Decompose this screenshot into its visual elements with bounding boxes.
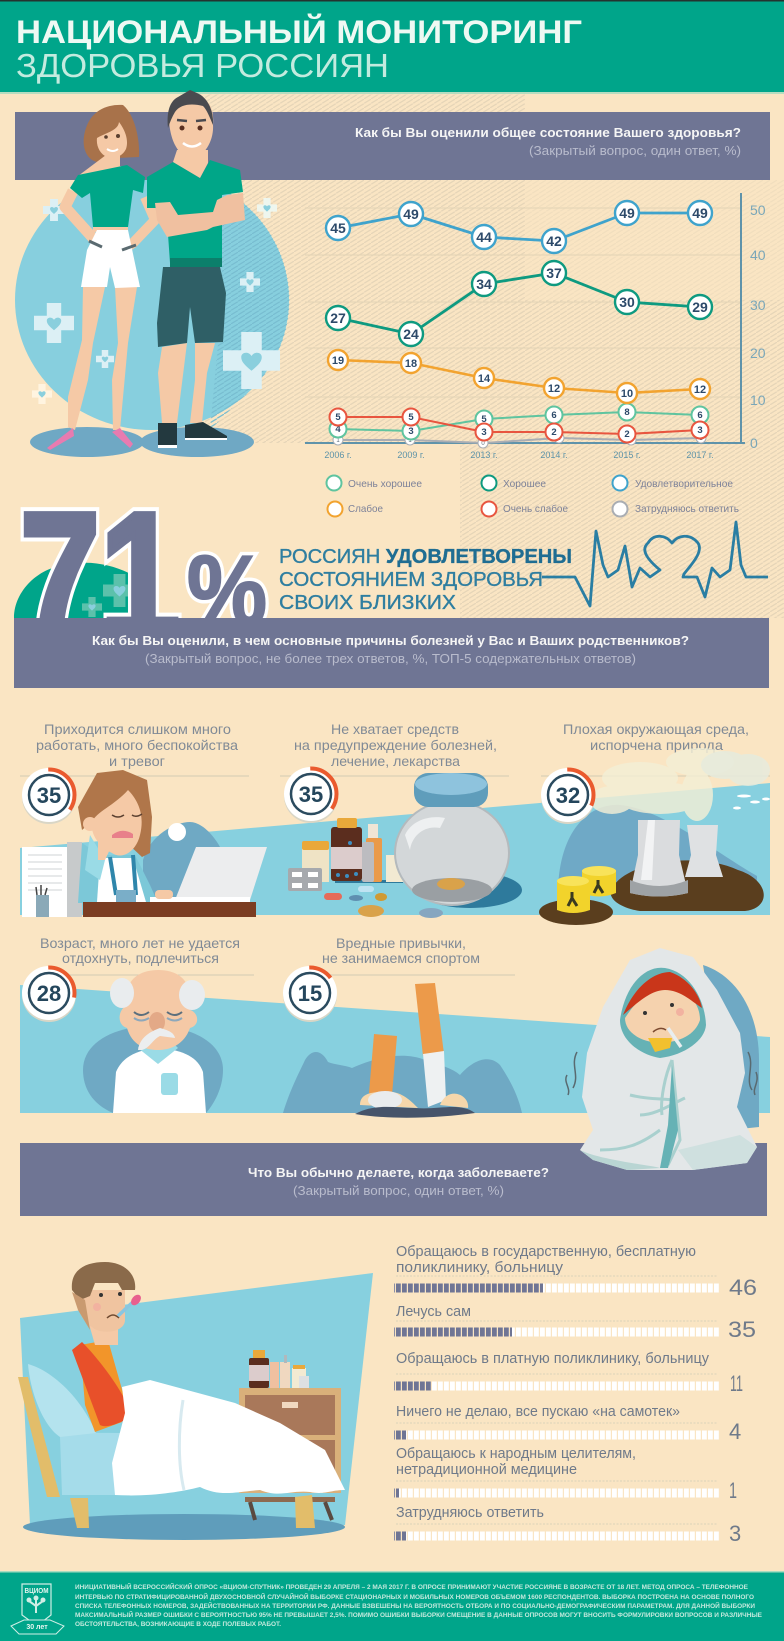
year labels: 2015 г.: [613, 450, 641, 460]
answers bar chart: нетрадиционной медицине: [396, 1462, 577, 1478]
footer logo: 30 лет: [26, 1624, 48, 1631]
legend: Очень слабое: [503, 503, 568, 515]
bed frame and mattress: [18, 1364, 315, 1528]
series: good: 34: [476, 276, 492, 292]
cause labels row 1: лечение, лекарства: [331, 753, 460, 769]
illustration: old man: [83, 970, 223, 1113]
causes row 2 band: [20, 985, 770, 1113]
icon: heartbeat line: [542, 522, 768, 606]
illustration: empty jar and medicine: [288, 773, 522, 918]
series: difficult to answer: 1: [629, 438, 633, 444]
panel: question 3: [20, 1143, 767, 1216]
illustration: person wrapped in blanket: [566, 948, 759, 1170]
series: good: 24: [403, 326, 419, 342]
gauge: 28 age: [22, 966, 76, 1022]
series: very poor: 2: [624, 429, 630, 440]
series: poor: 14: [478, 373, 491, 385]
subtitle: ЗДОРОВЬЯ РОССИЯН: [16, 47, 389, 84]
year labels: 2013 г.: [470, 450, 498, 460]
big number 71%: %: [187, 535, 267, 645]
answers bar chart: Обращаюсь в государственную, бесплатную: [396, 1244, 696, 1260]
axis labels: 10: [750, 392, 766, 408]
illustration: cigarettes: [283, 983, 522, 1118]
footer note: [75, 1582, 763, 1628]
gauge: 35 no funds: 35: [299, 782, 323, 807]
series: satisfactory: 49: [692, 205, 708, 221]
decorative crosses: [32, 198, 280, 404]
axis labels: 40: [750, 247, 766, 263]
statement text: СОСТОЯНИЕМ ЗДОРОВЬЯ: [279, 569, 543, 591]
series: poor: 10: [621, 388, 633, 400]
blanket: [112, 1380, 345, 1495]
cause labels row 1: работать, много беспокойства: [36, 737, 238, 753]
cause labels row 1: Не хватает средств: [331, 721, 459, 737]
panel: question 1: Как бы Вы оценили общее состояние Вашего здоровья?: [355, 125, 741, 140]
footer note: ИНИЦИАТИВНЫЙ ВСЕРОССИЙСКИЙ ОПРОС «ВЦИОМ-СПУТНИК» ПРОВЕДЕН 29 АПРЕЛЯ – 2 МАЯ 2017 Г. В ОПРОСЕ ПРИНИМАЮТ УЧАСТИЕ РОССИЯНЕ В ВОЗРАСТЕ ОТ 18 ЛЕТ. МЕТОД ОПРОСА – ТЕЛЕФОННОЕ: [75, 1582, 749, 1591]
causes row 1 band: [20, 783, 770, 915]
legend: Хорошее: [503, 478, 546, 490]
answers bar chart: 1: [729, 1478, 737, 1503]
legend: Удовлетворительное: [635, 478, 733, 490]
big number 71%: %: [187, 535, 267, 645]
year labels: [324, 450, 714, 460]
series: very good: 6: [551, 410, 557, 421]
series: very good: 4: [335, 424, 341, 435]
series: difficult to answer: [333, 433, 706, 448]
nightstand: [239, 1388, 341, 1520]
series: satisfactory: 42: [546, 233, 562, 249]
series: satisfactory: 49: [619, 205, 635, 221]
gauge: 15 habits: [283, 966, 337, 1022]
answers bar chart: поликлинику, больницу: [396, 1260, 564, 1276]
footer note: МАКСИМАЛЬНЫЙ РАЗМЕР ОШИБКИ С ВЕРОЯТНОСТЬЮ 95% НЕ ПРЕВЫШАЕТ 2,5%. ПОМИМО ОШИБКИ ВЫБОРКИ СМЕЩЕНИЕ В ДАННЫЕ ОПРОСОВ МОГУТ ВНОСИТЬ ФОРМУЛИРОВКИ ВОПРОСОВ И РАЗЛИЧНЫЕ: [75, 1610, 763, 1619]
gauge: 32 environment: [541, 768, 595, 824]
cause labels row 2: Возраст, много лет не удается: [40, 935, 240, 951]
series: difficult to answer: 1: [557, 436, 561, 442]
series: difficult to answer: 1: [336, 438, 340, 444]
illustration: power plant and pollution: [539, 748, 770, 925]
series: very poor: 3: [697, 425, 703, 436]
series: very poor: 5: [335, 412, 341, 423]
answers bar chart: Лечусь сам: [396, 1304, 471, 1320]
big number 71%: 71: [20, 476, 180, 677]
statement text: [279, 546, 572, 614]
footer note: ИНТЕРВЬЮ ПО СТРАТИФИЦИРОВАННОЙ ДВУХОСНОВНОЙ СЛУЧАЙНОЙ ВЫБОРКЕ СТАЦИОНАРНЫХ И МОБИЛЬНЫХ НОМЕРОВ ОБЪЕМОМ 1600 РЕСПОНДЕНТОВ. ВЫБОРКА ПОСТРОЕНА НА ОСНОВЕ ПОЛНОГО: [75, 1592, 754, 1601]
series: very poor: 5: [408, 412, 414, 423]
illustration: tired woman at laptop: [22, 770, 267, 917]
series: difficult to answer: 1: [408, 438, 412, 444]
series: good: 37: [546, 265, 562, 281]
axis labels: 30: [750, 297, 766, 313]
cause labels row 1: на предупреждение болезней,: [294, 737, 497, 753]
title: НАЦИОНАЛЬНЫЙ МОНИТОРИНГ: [16, 14, 582, 50]
gauge: 35 no funds: [284, 767, 338, 823]
year labels: 2009 г.: [397, 450, 425, 460]
series: poor: 12: [694, 384, 706, 396]
answers bar chart: 35: [728, 1317, 756, 1342]
statement text: РОССИЯН УДОВЛЕТВОРЕНЫ: [279, 546, 572, 568]
answers bar chart: Ничего не делаю, все пускаю «на самотек»: [396, 1404, 680, 1420]
footer note: СПИСКА ТЕЛЕФОННЫХ НОМЕРОВ, ЗАДЕЙСТВОВАННЫХ НА ТЕРРИТОРИИ РФ. ДАННЫЕ ВЗВЕШЕНЫ НА ВЕРОЯТНОСТЬ ОТБОРА И ПО СОЦИАЛЬНО-ДЕМОГРАФИЧЕСКИМ ПАРАМЕТРАМ. ДЛЯ ДАННОЙ ВЫБОРКИ: [75, 1601, 755, 1610]
series: poor: [328, 350, 710, 403]
year labels: 2017 г.: [686, 450, 714, 460]
series: satisfactory: 44: [476, 229, 492, 245]
gauge: 15 habits: 15: [298, 981, 322, 1006]
legend: [326, 476, 739, 516]
series: satisfactory: 49: [403, 206, 419, 222]
panel: question 2: Как бы Вы оценили, в чем основные причины болезней у Вас и Ваших родственников?: [92, 633, 689, 648]
footer logo: [11, 1584, 64, 1634]
answers bar chart: 3: [729, 1521, 741, 1546]
header: [0, 0, 784, 94]
thermometer: [118, 1300, 135, 1316]
panel: question 1: (Закрытый вопрос, один ответ, %): [529, 143, 741, 158]
answers bar chart: 4: [729, 1419, 741, 1444]
panel: question 3: Что Вы обычно делаете, когда заболеваете?: [248, 1165, 549, 1180]
answers bar chart: 11: [730, 1371, 743, 1396]
legend: Затрудняюсь ответить: [635, 503, 739, 515]
bottles: [249, 1350, 309, 1388]
axis labels: 20: [750, 345, 766, 361]
cause labels row 2: не занимаемся спортом: [322, 950, 480, 966]
gauge: 28 age: 28: [37, 981, 61, 1006]
series: very good: [330, 404, 708, 440]
cause labels row 1: [36, 721, 749, 769]
year labels: 2006 г.: [324, 450, 352, 460]
illustration: sick man in bed: [18, 1262, 373, 1540]
gauge: 35 overwork: 35: [37, 783, 61, 808]
cause labels row 1: Приходится слишком много: [44, 721, 231, 737]
cause labels row 2: отдохнуть, подлечиться: [62, 950, 219, 966]
illustration: woman: [47, 105, 155, 450]
gauge: 32 environment: 32: [556, 783, 580, 808]
series: very poor: [330, 408, 708, 442]
legend: Очень хорошее: [348, 478, 422, 490]
series: very good: 6: [697, 410, 703, 421]
illustration: man: [147, 90, 245, 448]
answers bar chart: [394, 1244, 757, 1546]
panel: question 1: [15, 112, 770, 180]
series: difficult to answer: 1: [699, 436, 703, 442]
series: poor: 12: [548, 383, 560, 395]
series: good: 29: [692, 299, 708, 315]
series: poor: 19: [332, 355, 344, 367]
cause labels row 2: Вредные привычки,: [336, 935, 466, 951]
big number 71%: 71: [20, 476, 180, 677]
answers bar chart: 46: [729, 1275, 757, 1300]
footer logo: ВЦИОМ: [24, 1588, 49, 1595]
cause labels row 1: испорчена природа: [590, 737, 723, 753]
series: satisfactory: 45: [330, 220, 346, 236]
man: [72, 1262, 143, 1432]
cause labels row 1: и тревог: [109, 753, 165, 769]
footer: [0, 1571, 784, 1641]
series: very good: 5: [481, 414, 487, 425]
series: difficult to answer: 0: [481, 441, 485, 447]
gauge: 35 overwork: [22, 768, 76, 824]
cause labels row 1: Плохая окружающая среда,: [563, 721, 749, 737]
green dome behind 71: [14, 563, 138, 618]
footer note: ОБСТОЯТЕЛЬСТВА, ВОЗНИКАЮЩИЕ В ХОДЕ ПОЛЕВЫХ РАБОТ.: [75, 1621, 281, 1628]
legend: Слабое: [348, 503, 383, 515]
chart axes: [305, 193, 745, 443]
series: good: 27: [330, 310, 346, 326]
axis labels: [750, 202, 766, 451]
series: very good: 3: [408, 426, 414, 437]
series: very poor: 2: [551, 427, 557, 438]
cause labels row 2: [40, 935, 480, 966]
statement text: СВОИХ БЛИЗКИХ: [279, 592, 456, 614]
line chart: [305, 193, 766, 460]
axis labels: 50: [750, 202, 766, 218]
series: good: [326, 261, 712, 346]
panel: question 2: [14, 618, 769, 688]
series: satisfactory: [326, 201, 712, 253]
series: very poor: 3: [481, 427, 487, 438]
year labels: 2014 г.: [540, 450, 568, 460]
panel: question 2: (Закрытый вопрос, не более трех ответов, %, ТОП-5 содержательных ответов): [145, 651, 636, 666]
answers bar chart: Обращаюсь к народным целителям,: [396, 1446, 636, 1462]
axis labels: 0: [750, 435, 758, 451]
panel: question 3: (Закрытый вопрос, один ответ, %): [293, 1183, 504, 1198]
series: very good: 8: [624, 407, 630, 418]
shiver marks: [566, 1052, 757, 1095]
series: good: 30: [619, 294, 635, 310]
series: poor: 18: [405, 358, 417, 370]
answers bar chart: Обращаюсь в платную поликлинику, больницу: [396, 1351, 710, 1367]
answers bar chart: Затрудняюсь ответить: [396, 1505, 544, 1521]
circle behind people: [15, 170, 289, 457]
